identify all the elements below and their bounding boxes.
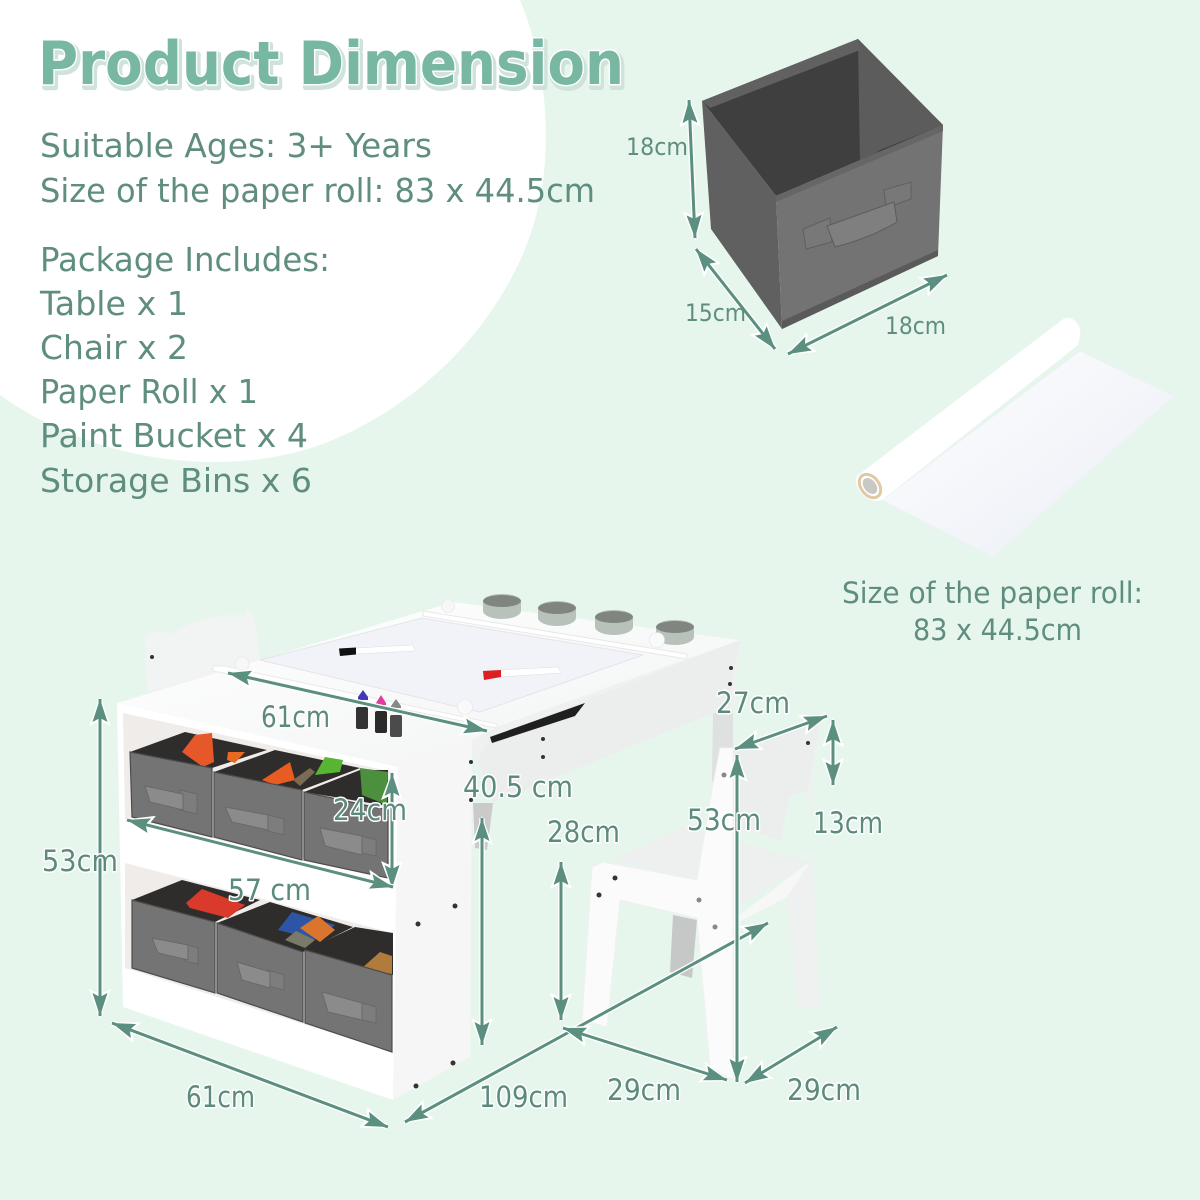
far back leg	[670, 915, 697, 978]
table and chair dimension labels: 29cm	[787, 1073, 861, 1107]
package includes list: Storage Bins x 6	[40, 461, 312, 500]
table and chair dimension labels: 109cm	[479, 1080, 568, 1114]
paint buckets	[483, 594, 694, 645]
package includes list: Table x 1	[39, 284, 188, 323]
package includes list	[39, 240, 330, 500]
storage unit cabinet	[117, 703, 473, 1100]
seat	[613, 827, 810, 910]
marker black	[339, 645, 415, 656]
paper roll caption: 83 x 44.5cm	[913, 613, 1082, 647]
table dimension arrows	[100, 673, 768, 1127]
paper roll caption	[842, 576, 1143, 647]
specs text block	[40, 126, 595, 210]
table and chair dimension labels: 24cm	[333, 793, 407, 827]
paper roll caption: Size of the paper roll:	[842, 576, 1143, 610]
upper shelf opening	[123, 713, 393, 877]
bin dimension arrows	[689, 100, 947, 354]
bin dimension labels: 15cm	[685, 299, 746, 327]
specs text block: Size of the paper roll: 83 x 44.5cm	[40, 171, 595, 210]
backrest	[733, 717, 820, 840]
table and chair dimension labels	[42, 686, 883, 1114]
storage bin photo	[702, 39, 943, 329]
chair dimension arrows	[561, 716, 837, 1083]
table and chair dimension labels: 13cm	[813, 806, 883, 840]
table and chair dimension labels: 28cm	[547, 815, 620, 849]
table and chair dimension labels: 57 cm	[228, 873, 311, 907]
storage bins in cabinet	[130, 732, 393, 1052]
front chair	[582, 713, 823, 1080]
bin dimension labels: 18cm	[626, 133, 688, 161]
table and chair dimension labels: 29cm	[607, 1073, 681, 1107]
top row bins	[130, 732, 267, 768]
table and chair dimension labels: 27cm	[716, 686, 790, 720]
table and chair dimension labels: 61cm	[261, 700, 330, 734]
title: Product Dimension	[40, 32, 626, 102]
bin dimension labels: 18cm	[885, 312, 946, 340]
chair screws	[612, 876, 618, 880]
whiteboard	[260, 618, 643, 712]
rails	[423, 611, 687, 659]
package includes list: Paper Roll x 1	[40, 372, 258, 411]
bottom row bins	[132, 880, 260, 922]
specs text block: Suitable Ages: 3+ Years	[40, 126, 432, 165]
toys top	[182, 733, 214, 767]
side screws	[416, 922, 420, 926]
toys bottom	[186, 889, 245, 918]
package includes list: Chair x 2	[40, 328, 188, 367]
near side panel	[582, 748, 733, 1080]
marker red	[483, 667, 561, 680]
table and chair dimension labels: 61cm	[186, 1080, 255, 1114]
table and chair dimension labels: 53cm	[687, 803, 761, 837]
art table top and apron	[117, 594, 740, 850]
package includes list: Package Includes:	[40, 240, 330, 279]
far side post and leg	[787, 713, 823, 1013]
standing pens	[356, 707, 368, 729]
bin dimension labels	[626, 133, 946, 340]
slot	[490, 703, 585, 743]
back chair	[145, 610, 260, 692]
paper roll	[855, 318, 1174, 557]
table and chair dimension labels: 53cm	[42, 844, 118, 878]
title: Product Dimension	[38, 29, 624, 99]
package includes list: Paint Bucket x 4	[40, 416, 308, 455]
balls	[442, 600, 454, 612]
apron screws	[541, 737, 545, 741]
lower shelf opening	[125, 863, 393, 1052]
table and chair dimension labels: 40.5 cm	[463, 770, 573, 804]
white corner blob	[0, 0, 546, 462]
